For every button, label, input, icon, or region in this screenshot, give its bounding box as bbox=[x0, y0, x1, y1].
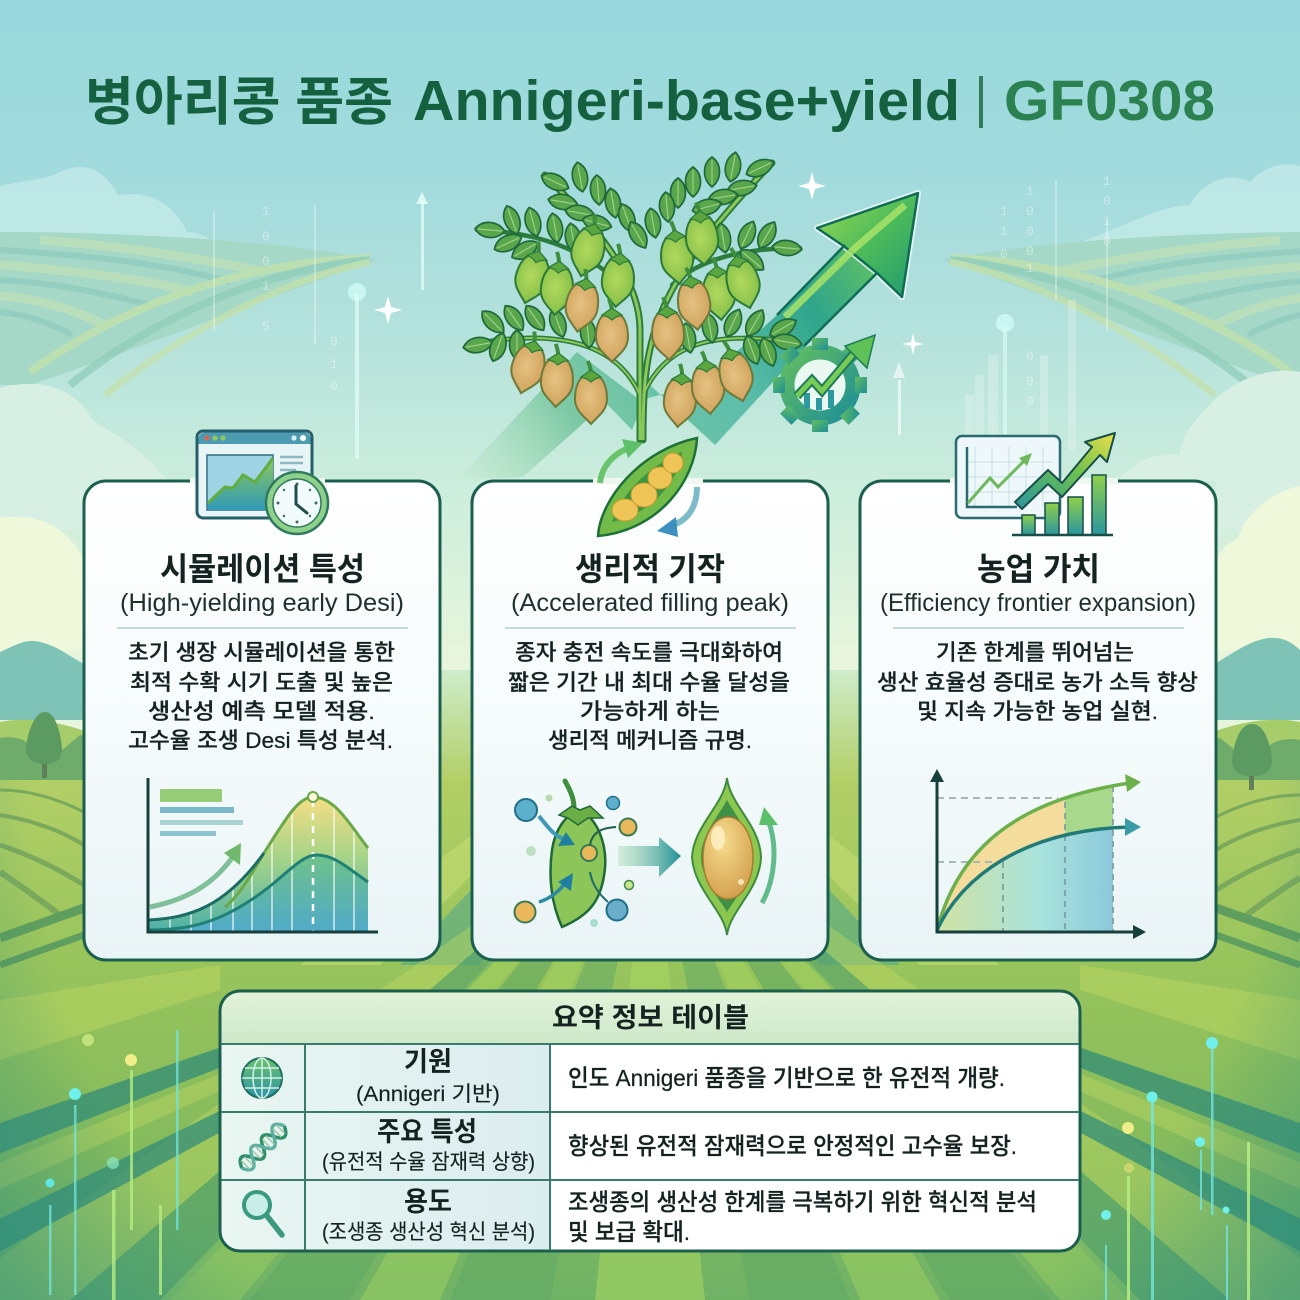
panel: physiological mechanism bbox=[472, 438, 828, 960]
right field light lines bbox=[1101, 1037, 1250, 1300]
title: Annigeri-base+yield bbox=[413, 69, 960, 133]
row: use: 용도 bbox=[404, 1187, 452, 1217]
leaves bbox=[462, 151, 803, 369]
central fan stripes bbox=[0, 800, 1300, 1300]
table heading: 요약 정보 테이블 bbox=[552, 1003, 749, 1033]
background digital data streams: 1 bbox=[1103, 174, 1111, 189]
heading: 농업 가치 bbox=[977, 551, 1100, 587]
background digital data streams: 1 bbox=[330, 357, 338, 372]
body text: 고수율 조생 Desi 특성 분석. bbox=[128, 728, 393, 753]
background digital data streams: 0 bbox=[1026, 224, 1034, 239]
row: origin bbox=[242, 1047, 1005, 1106]
icon: DNA helix bbox=[236, 1120, 290, 1174]
row: use bbox=[244, 1187, 1037, 1245]
field base bbox=[0, 780, 1300, 1300]
row: use: 및 보급 확대. bbox=[568, 1219, 690, 1245]
background digital data streams: 0 bbox=[262, 229, 270, 244]
row: use: 조생종의 생산성 한계를 극복하기 위한 혁신적 분석 bbox=[568, 1189, 1037, 1215]
sparkles bbox=[798, 172, 924, 435]
background digital data streams: 1 bbox=[1026, 261, 1034, 276]
near hills bbox=[0, 720, 110, 782]
body text: 짧은 기간 내 최대 수율 달성을 bbox=[508, 670, 790, 695]
panel: simulation traits bbox=[84, 431, 440, 960]
upper field stripes between cards bbox=[300, 700, 1000, 965]
icon: browser window with clock bbox=[197, 431, 328, 534]
background digital data streams: 1 bbox=[1026, 184, 1034, 199]
background digital data streams: 0 bbox=[1103, 234, 1111, 249]
row: key traits bbox=[236, 1117, 1017, 1174]
growth arrow behind plant bbox=[457, 193, 918, 480]
mature tan pods bbox=[506, 265, 758, 428]
body text bbox=[508, 640, 790, 753]
body text: 최적 수확 시기 도출 및 높은 bbox=[130, 670, 393, 695]
green pods bbox=[510, 201, 765, 321]
left field light lines bbox=[46, 1030, 178, 1300]
background digital data streams: 1 bbox=[262, 279, 270, 294]
background digital data streams: 1 bbox=[1000, 204, 1008, 219]
icon: globe bbox=[242, 1058, 282, 1098]
chickpea plant bbox=[462, 151, 803, 440]
chart: growth curves bbox=[148, 778, 378, 932]
row: key traits: 향상된 유전적 잠재력으로 안정적인 고수율 보장. bbox=[568, 1133, 1017, 1159]
subheading: (Accelerated filling peak) bbox=[511, 589, 789, 617]
background digital data streams: 0 bbox=[262, 254, 270, 269]
body text: 생산 효율성 증대로 농가 소득 향상 bbox=[877, 670, 1198, 695]
body text: 및 지속 가능한 농업 실현. bbox=[917, 699, 1158, 724]
summary table bbox=[220, 991, 1080, 1251]
background digital data streams: 0 bbox=[330, 334, 338, 349]
background digital data streams: 5 bbox=[262, 319, 270, 334]
title: GF0308 bbox=[1004, 69, 1215, 133]
body text: 초기 생장 시뮬레이션을 통한 bbox=[128, 640, 395, 665]
background digital data streams: 1 bbox=[262, 204, 270, 219]
background digital data streams: 0 bbox=[1026, 394, 1034, 409]
side fan stripes bbox=[0, 1048, 1300, 1252]
row: key traits: 주요 특성 bbox=[377, 1117, 477, 1147]
background digital data streams: 0 bbox=[1026, 204, 1034, 219]
panel: agricultural value bbox=[860, 433, 1216, 960]
subheading: (High-yielding early Desi) bbox=[120, 589, 404, 617]
background digital data streams: 0 bbox=[1026, 374, 1034, 389]
body text: 종자 충전 속도를 극대화하여 bbox=[515, 640, 783, 665]
background digital data streams: 0 bbox=[1026, 349, 1034, 364]
row: use: (조생종 생산성 혁신 분석) bbox=[322, 1221, 535, 1244]
glow arrows bbox=[348, 192, 1014, 459]
upper clouds bbox=[0, 164, 1300, 260]
heading: 시뮬레이션 특성 bbox=[160, 551, 365, 587]
tree left bbox=[26, 712, 62, 778]
diagram: nutrient flow into seed bbox=[514, 778, 778, 935]
background digital data streams: 1 bbox=[1000, 224, 1008, 239]
body text: 가능하게 하는 bbox=[580, 699, 720, 724]
stems bbox=[467, 163, 800, 440]
body text: 생리적 메커니즘 규명. bbox=[548, 728, 752, 753]
icon: open pea pod with cycle arrows bbox=[598, 438, 697, 537]
background digital data streams: 0 bbox=[330, 379, 338, 394]
subheading: (Efficiency frontier expansion) bbox=[880, 589, 1196, 617]
title bbox=[85, 69, 1215, 133]
side field rows bbox=[0, 790, 1300, 965]
mountains bbox=[0, 641, 140, 720]
distant striped hills bbox=[0, 232, 1300, 395]
icon: chart with rising bars bbox=[956, 433, 1115, 535]
title: 병아리콩 품종 bbox=[85, 74, 393, 132]
tree right bbox=[1232, 724, 1272, 790]
body text: 기존 한계를 뛰어넘는 bbox=[936, 640, 1134, 665]
row: key traits: (유전적 수율 잠재력 상향) bbox=[322, 1151, 535, 1174]
chart: efficiency frontier bbox=[930, 769, 1146, 939]
body text bbox=[877, 640, 1198, 724]
row: origin: (Annigeri 기반) bbox=[356, 1083, 500, 1106]
background digital data streams: 0 bbox=[1026, 244, 1034, 259]
lower clouds bbox=[0, 371, 1300, 650]
icon: gear with growth arrow bbox=[773, 335, 875, 432]
trees bbox=[26, 712, 1272, 790]
icon: magnifying glass bbox=[244, 1192, 282, 1235]
row: origin: 인도 Annigeri 품종을 기반으로 한 유전적 개량. bbox=[568, 1065, 1005, 1091]
body text bbox=[128, 640, 395, 753]
background digital data streams: 1 bbox=[1103, 214, 1111, 229]
background digital data streams: 0 bbox=[1103, 194, 1111, 209]
heading: 생리적 기작 bbox=[575, 551, 725, 587]
body text: 생산성 예측 모델 적용. bbox=[148, 699, 375, 724]
background digital data streams: 0 bbox=[1000, 247, 1008, 262]
row: origin: 기원 bbox=[404, 1047, 452, 1077]
